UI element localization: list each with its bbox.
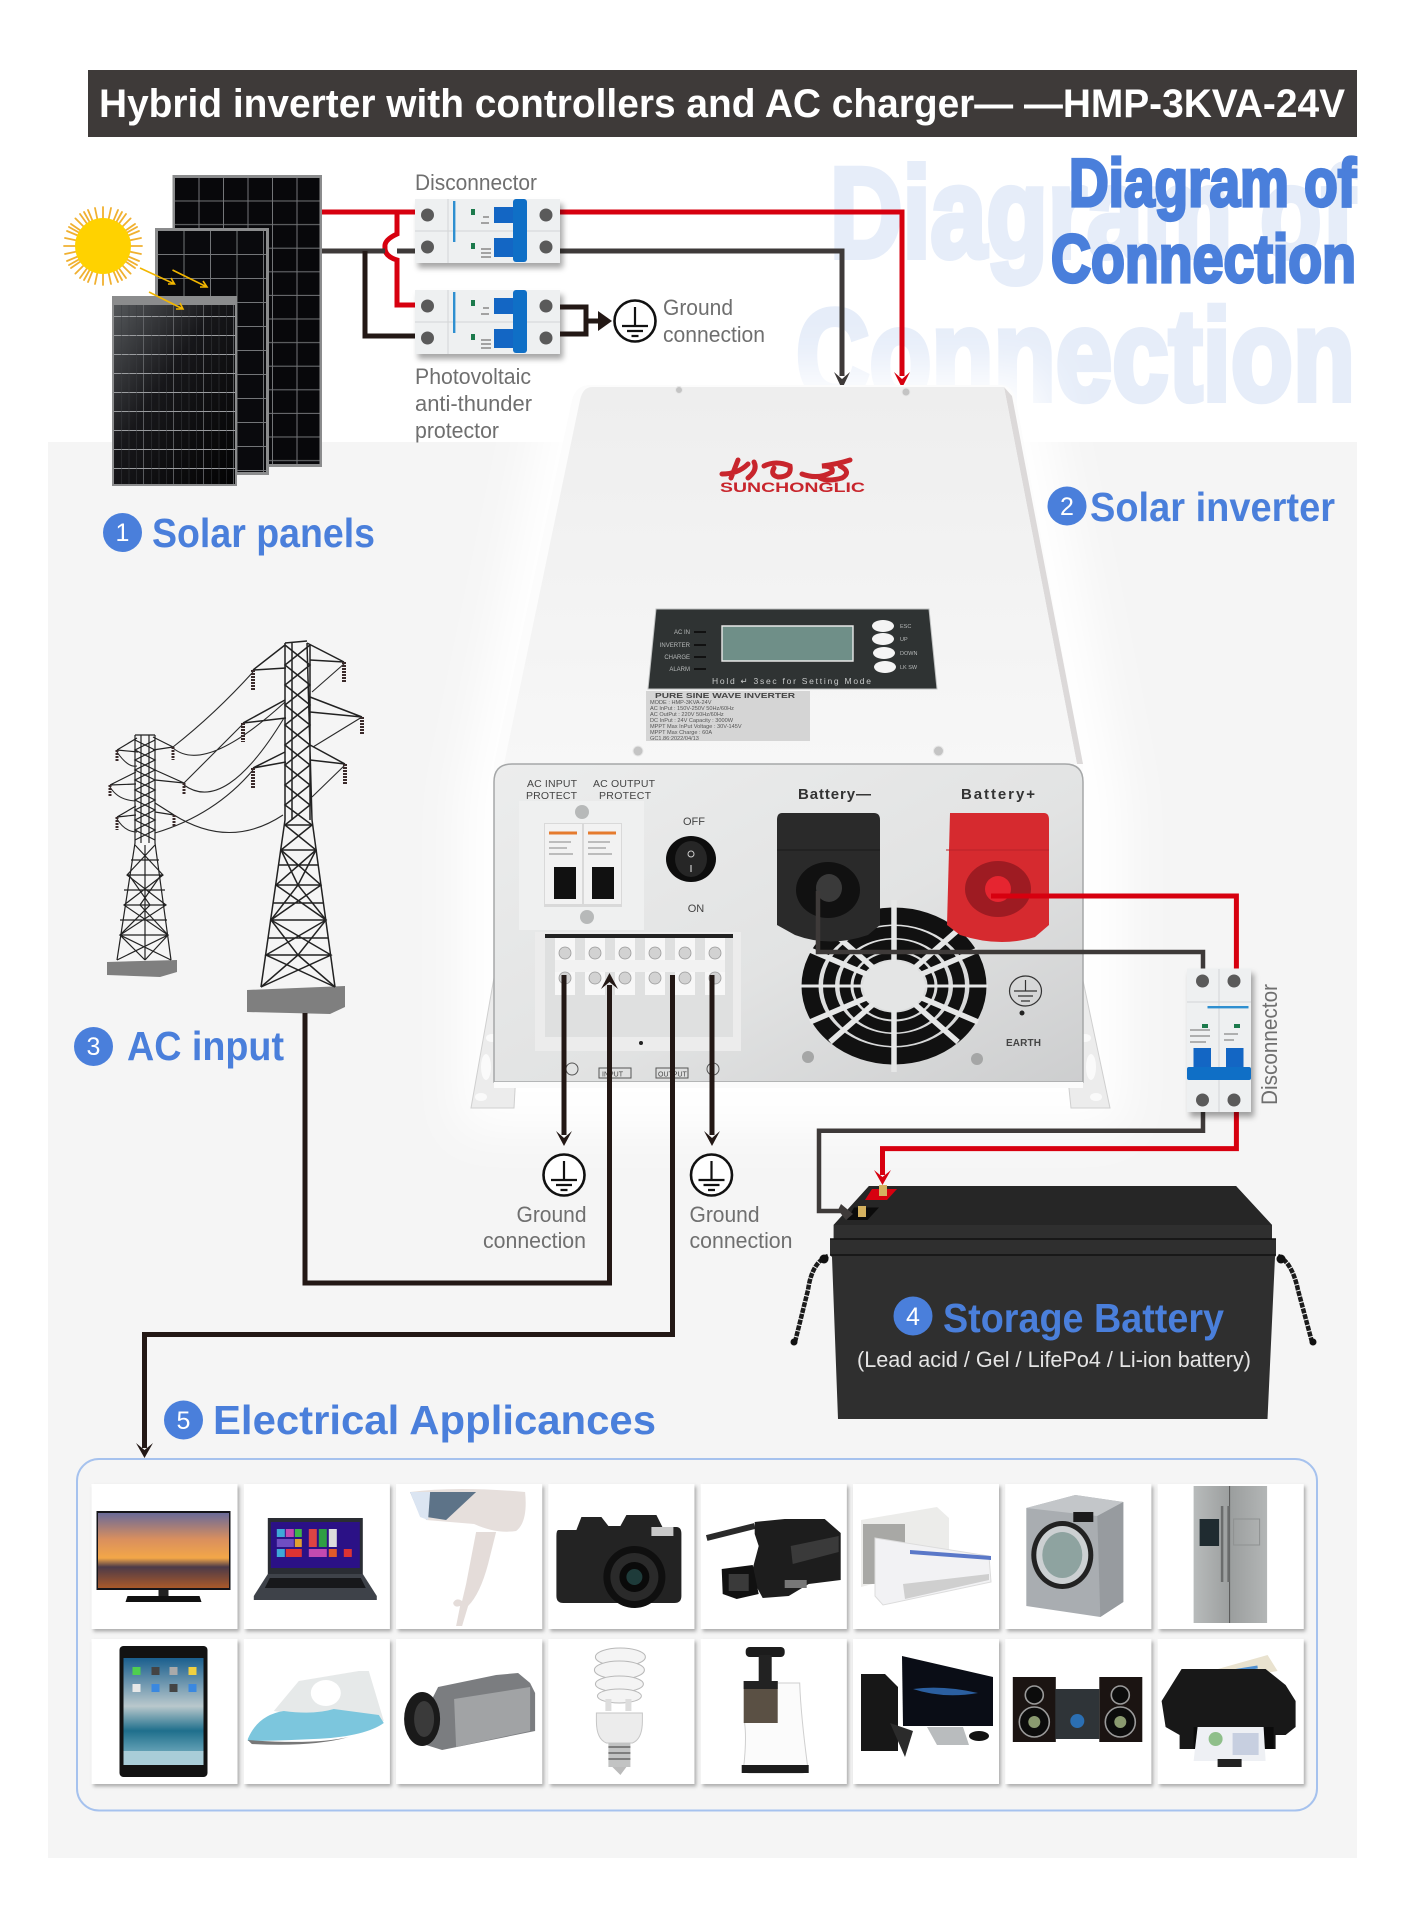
control panel: CHARGE	[664, 655, 690, 661]
label: Ground connection right: connection	[690, 1228, 792, 1253]
power switch: ON	[688, 903, 704, 915]
heading: 1 Solar panels: Solar panels	[152, 510, 375, 556]
panel: middle solar module	[155, 228, 269, 475]
battery positive terminal	[946, 813, 1049, 942]
control panel: INVERTER	[660, 643, 691, 649]
spec label: DC InPut : 24V Capacity : 3000W	[650, 718, 734, 724]
label: Battery minus: Battery—	[798, 786, 871, 803]
breaker plate	[519, 801, 644, 930]
input output marks: INPUT	[602, 1072, 624, 1078]
heading: 3 AC input: 3	[87, 1033, 100, 1061]
label: Ground connection top: connection	[663, 322, 765, 347]
appliance: hair dryer	[396, 1484, 542, 1629]
tower small lattice	[110, 735, 184, 960]
arrows: sunlight rays	[140, 268, 207, 309]
appliance: juicer	[701, 1639, 847, 1784]
heading: 5 Electrical Applicances: Electrical Applicances	[213, 1397, 656, 1443]
appliance: CFL bulb	[548, 1639, 694, 1784]
appliance: laptop	[244, 1484, 390, 1629]
spec label	[646, 691, 810, 742]
battery negative terminal	[777, 813, 880, 942]
top screws	[633, 386, 944, 756]
heading: 2 Solar inverter: Solar inverter	[1090, 484, 1335, 530]
overhead cables	[110, 663, 362, 833]
LCD screen	[722, 626, 853, 661]
appliance: steam iron	[244, 1639, 390, 1784]
power towers	[107, 641, 362, 1014]
top surface	[504, 387, 1077, 764]
spec label: PURE SINE WAVE INVERTER	[655, 693, 795, 700]
wire: ground left	[562, 975, 566, 1135]
wire: inverter output to appliances	[144, 975, 672, 1448]
battery type note: (Lead acid / Gel / LifePo4 / Li-ion battery)	[857, 1347, 1251, 1372]
wires: battery negative	[818, 891, 1203, 1211]
control panel: DOWN	[900, 651, 917, 657]
protect labels: AC INPUT	[527, 778, 578, 790]
white glow around inverter	[460, 370, 1125, 1130]
heading: 4 Storage Battery: Storage Battery	[943, 1295, 1224, 1341]
tower base large	[247, 986, 345, 1014]
heading: 3 AC input: AC input	[127, 1023, 284, 1069]
body sides	[494, 385, 1083, 880]
protect labels: AC OUTPUT	[593, 778, 656, 790]
battery terminals	[847, 1185, 897, 1220]
battery case	[830, 1186, 1276, 1419]
label: Ground connection top: Ground	[663, 295, 733, 320]
icon: ground symbol top	[614, 300, 656, 342]
heading: 5 Electrical Applicances: 5	[177, 1407, 190, 1435]
brand logo: SUNCHONGLIC	[720, 479, 865, 495]
spec label: MPPT Max Charge : 60A	[650, 730, 712, 736]
wires: PV negative (dark)	[322, 251, 842, 376]
battery rope handles	[790, 1254, 1316, 1346]
label: Ground connection top	[663, 295, 765, 347]
appliance: printer	[1158, 1639, 1304, 1784]
control panel: ESC	[900, 624, 911, 630]
label: Photovoltaic anti-thunder protector: anti-thunder	[415, 391, 532, 416]
brand logo	[720, 460, 865, 495]
control panel: AC IN	[674, 630, 690, 636]
control panel	[648, 609, 937, 689]
label: Ground connection right: Ground	[690, 1202, 760, 1227]
heading: 1 Solar panels: 1	[116, 519, 129, 547]
appliance: camcorder	[396, 1639, 542, 1784]
icon: ground symbol right	[691, 1154, 732, 1196]
spec label: AC InPut : 150V-250V 50Hz/60Hz	[650, 706, 734, 712]
arrow: battery positive	[874, 1170, 891, 1185]
storage battery	[790, 1185, 1316, 1419]
heading: 4 Storage Battery: 4	[906, 1303, 920, 1331]
appliance: pro video camera	[701, 1484, 847, 1629]
appliance: air conditioner	[853, 1484, 999, 1629]
wire: AC input from tower to inverter	[305, 985, 610, 1283]
heading: Diagram of Connection	[1051, 145, 1356, 297]
tower small insulators	[110, 747, 184, 830]
arrow: red into inverter	[894, 372, 910, 388]
control panel: Hold ↵ 3sec for Setting Mode	[712, 676, 871, 686]
spec label: MPPT Max InPut Voltage : 30V-145V	[650, 724, 742, 730]
label: Battery plus: Battery+	[961, 786, 1035, 803]
earth mark: EARTH	[1006, 1038, 1041, 1049]
control panel: ALARM	[669, 667, 690, 673]
appliance: TV	[92, 1484, 238, 1629]
control panel: LK SW	[900, 665, 918, 671]
label: Disconnector: Disconnector	[415, 170, 537, 195]
label: Photovoltaic anti-thunder protector: Photovoltaic	[415, 364, 531, 389]
wires: protector to ground	[560, 307, 612, 334]
tower base small	[107, 960, 177, 977]
grey backdrop panel	[48, 442, 1357, 1858]
panel: appliances	[77, 1459, 1317, 1810]
panel: back solar module	[172, 175, 322, 467]
appliance: washing machine	[1005, 1484, 1151, 1629]
appliance: desktop computer	[853, 1639, 999, 1784]
wire: ground right	[710, 975, 714, 1135]
icon: sun	[64, 207, 142, 285]
anti-thunder protector breaker	[415, 290, 560, 354]
watermark heading	[796, 142, 1355, 428]
panel: front solar module	[112, 296, 237, 486]
label: Ground connection left: Ground	[516, 1202, 586, 1227]
protect labels: PROTECT	[526, 790, 578, 802]
spec label: MODE : HMP-3KVA-24V	[650, 700, 712, 706]
tower large insulators	[243, 662, 362, 788]
battery disconnector breaker	[1187, 968, 1251, 1112]
label: Ground connection right	[690, 1202, 792, 1253]
terminal block	[535, 932, 741, 1051]
label: Ground connection left	[483, 1202, 586, 1253]
tower large lattice	[243, 641, 362, 987]
arrow: ground right	[704, 1131, 720, 1146]
appliance: tablet	[92, 1639, 238, 1784]
power switch: OFF	[683, 816, 705, 828]
front face	[494, 764, 1083, 1082]
power switch	[666, 816, 716, 915]
control panel: UP	[900, 637, 908, 643]
spec label: AC OutPut : 220V 50Hz/60Hz	[650, 712, 724, 718]
arrow: to appliances	[136, 1443, 153, 1458]
title bar	[88, 70, 1357, 137]
icon: ground symbol left	[544, 1154, 584, 1196]
arrow: ground left	[556, 1131, 572, 1146]
arrow: AC input up	[601, 973, 618, 989]
input output marks: OUTPUT	[658, 1072, 688, 1078]
solar panels	[112, 175, 322, 486]
arrow: battery negative	[838, 1204, 853, 1220]
spec label: GC1.86:2022/04/13	[650, 736, 699, 742]
wire: protector earth lead	[365, 251, 415, 336]
earth mark	[1006, 976, 1042, 1049]
cooling fan	[800, 900, 988, 1072]
protect labels	[526, 778, 656, 802]
label: Photovoltaic anti-thunder protector	[415, 364, 532, 443]
label: Ground connection left: connection	[483, 1228, 586, 1253]
wires: PV positive (red)	[322, 212, 902, 376]
appliance: stereo system	[1005, 1639, 1151, 1784]
appliance: camera	[548, 1484, 694, 1629]
arrow: dark into inverter	[834, 372, 850, 389]
heading: 2 Solar inverter: 2	[1060, 493, 1074, 521]
wires: battery positive	[882, 896, 1236, 1175]
protect labels: PROTECT	[599, 790, 652, 802]
label: Disconnector vertical: Disconnector	[1257, 984, 1282, 1105]
title bar: Hybrid inverter with controllers and AC charger— —HMP-3KVA-24V	[99, 82, 1345, 126]
input output marks	[566, 1063, 719, 1078]
appliance: refrigerator	[1158, 1484, 1304, 1629]
label: Photovoltaic anti-thunder protector: protector	[415, 418, 499, 443]
mounting feet	[471, 955, 1110, 1108]
inverter	[471, 385, 1110, 1108]
disconnector breaker	[415, 199, 560, 263]
